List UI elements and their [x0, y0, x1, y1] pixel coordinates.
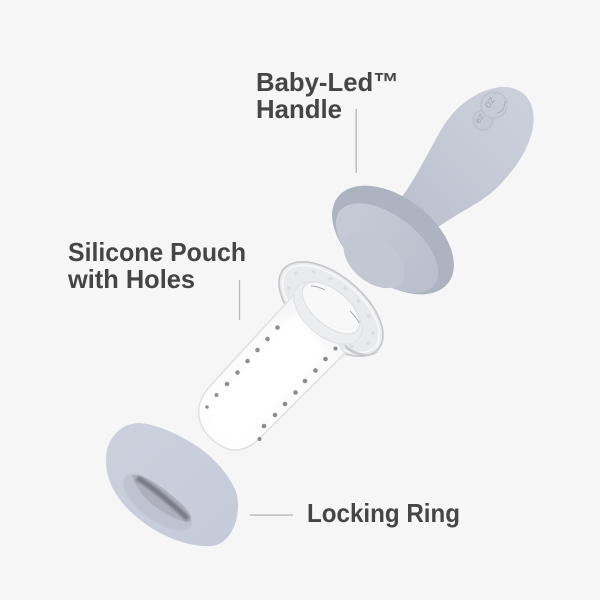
flange step: [320, 186, 454, 310]
rim shadow: [344, 344, 379, 356]
pouch tube: [199, 288, 345, 450]
label: Locking Ring: Locking Ring: [307, 498, 460, 528]
logo smile: [497, 101, 505, 113]
flange: [312, 164, 474, 316]
flange plug: [333, 221, 415, 299]
leader line: handle: [356, 109, 357, 173]
ring opening: [132, 475, 191, 522]
handle body: [398, 87, 534, 229]
label: Baby-Led Handle: Handle: [256, 94, 342, 124]
ring inner shadow: [137, 478, 188, 519]
rim texture: [276, 257, 386, 361]
pouch tube glow: [211, 312, 326, 439]
pouch rim: [262, 244, 400, 374]
leader line: pouch: [239, 280, 240, 320]
silicone pouch: [199, 244, 400, 450]
logo: [472, 92, 507, 130]
holes: lower row: [258, 346, 338, 441]
rim opening marks: [311, 286, 359, 323]
locking ring: [106, 423, 238, 546]
logo letters ez: ez: [472, 111, 486, 125]
label: Silicone Pouch with Holes: Silicone Pouch: [68, 237, 246, 267]
baby-led handle part: [312, 87, 534, 316]
label: Silicone Pouch with Holes: [67, 237, 246, 294]
ring body: [106, 423, 238, 546]
logo disc large: [481, 92, 507, 118]
ring dish: [123, 474, 192, 531]
pouch sleeve: [283, 270, 373, 356]
logo letters oz: oz: [482, 94, 498, 111]
label: Baby-Led Handle: [256, 67, 399, 124]
logo disc small: [473, 110, 493, 130]
label: Baby-Led Handle: Baby-Led™: [256, 67, 399, 97]
holes: upper row: [205, 325, 280, 409]
rim highlight: [268, 249, 394, 369]
leader line: ring: [250, 514, 293, 516]
label: Silicone Pouch with Holes: with Holes: [67, 264, 195, 294]
rim opening: [293, 272, 369, 344]
